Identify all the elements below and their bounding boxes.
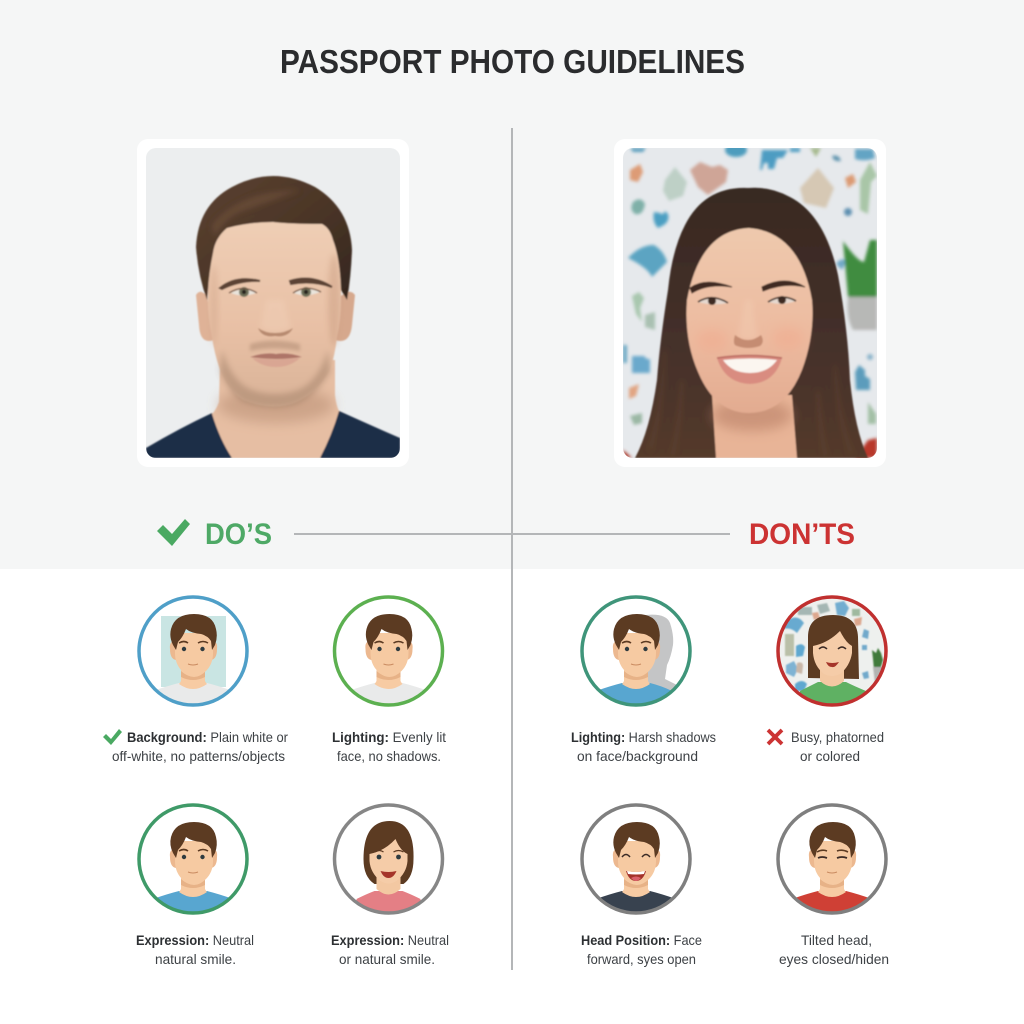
caption: expression do	[136, 932, 254, 967]
title: PASSPORT PHOTO GUIDELINES	[280, 43, 745, 80]
panel: correct photo	[137, 139, 409, 467]
caption: expression do: Expression: Neutral	[136, 932, 254, 948]
horizontal divider	[294, 533, 730, 535]
vertical divider	[511, 128, 513, 970]
caption: background don't	[768, 729, 884, 764]
caption: lighting don't: Lighting: Harsh shadows	[571, 729, 716, 745]
caption: head position don't: Head Position: Face	[581, 932, 702, 948]
panel: incorrect photo	[614, 139, 886, 467]
caption: background don't: Busy, phatorned	[791, 729, 884, 745]
caption: lighting don't	[571, 729, 716, 764]
photo: man	[146, 148, 400, 458]
icon: harsh shadow avatar	[582, 597, 690, 711]
icon: even lighting avatar	[334, 597, 442, 711]
icon: closed eyes avatar	[778, 805, 886, 919]
icon: busy background avatar	[778, 597, 886, 711]
top band background	[0, 0, 1024, 569]
caption: expression do second	[331, 932, 449, 967]
icon: plain background avatar	[139, 597, 247, 711]
caption: expression do second: Expression: Neutral	[331, 932, 449, 948]
heading: DON'TS: DON’TS	[749, 518, 855, 551]
check icon: DO'S	[157, 519, 190, 546]
caption: lighting do: face, no shadows.	[337, 748, 441, 764]
icon: neutral expression avatar	[139, 805, 247, 919]
heading: DO'S: DO’S	[205, 518, 272, 551]
icon: natural smile avatar	[334, 805, 442, 919]
caption: lighting don't: on face/background	[577, 748, 698, 764]
caption: background don't: or colored	[800, 748, 860, 764]
caption: tilted head don't	[779, 932, 889, 967]
caption: head position don't: forward, syes open	[587, 951, 696, 967]
caption: expression do: natural smile.	[155, 951, 236, 967]
photo frame	[137, 139, 409, 467]
caption: lighting do	[332, 729, 446, 764]
photo: woman with busy background	[623, 143, 877, 458]
caption: lighting do: Lighting: Evenly lit	[332, 729, 446, 745]
icon: laughing avatar	[582, 805, 690, 919]
caption: expression do second: or natural smile.	[339, 951, 435, 967]
caption: background do	[103, 729, 288, 764]
icon: cross mark	[768, 730, 782, 744]
caption: background do: off-white, no patterns/objects	[112, 748, 285, 764]
photo frame	[614, 139, 886, 467]
icon: check mark	[103, 729, 122, 745]
caption: tilted head don't: eyes closed/hiden	[779, 951, 889, 967]
caption: head position don't	[581, 932, 702, 967]
caption: background do: Background: Plain white or	[127, 729, 288, 745]
caption: tilted head don't: Tilted head,	[801, 932, 872, 948]
